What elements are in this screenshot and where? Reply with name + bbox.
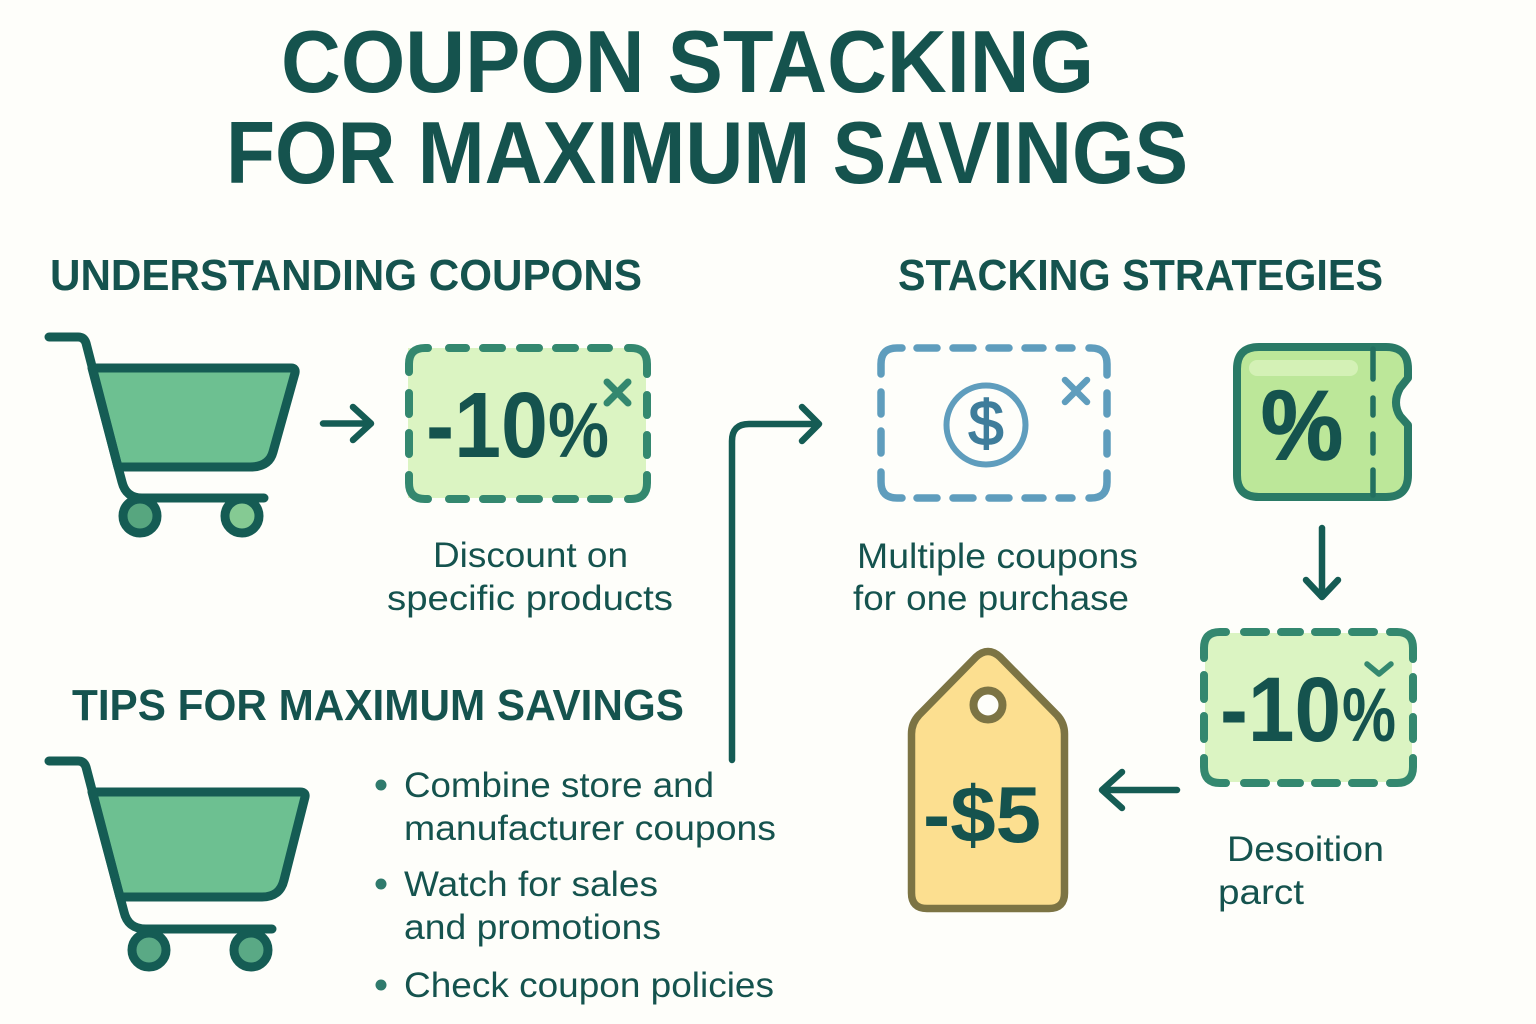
coupon: dollar: $	[968, 389, 1004, 459]
coupon: percent ticket	[1237, 347, 1408, 497]
text: multiple coupons caption: Multiple coupons	[857, 537, 1138, 576]
coupon: minus 10 percent: %	[548, 386, 609, 474]
coupon: second minus 10 percent	[1204, 632, 1413, 783]
text: multiple coupons caption: for one purchase	[853, 579, 1129, 618]
price tag	[912, 652, 1064, 908]
arrow: left	[1102, 772, 1177, 808]
arrow: down	[1306, 528, 1338, 597]
arrow: tips to strategies	[732, 407, 819, 760]
title: FOR MAXIMUM SAVINGS	[226, 103, 1188, 202]
heading: understanding coupons: UNDERSTANDING COUPONS	[50, 251, 642, 300]
title	[226, 12, 1188, 202]
text: desoition caption	[1218, 830, 1384, 912]
text: multiple coupons caption	[853, 537, 1138, 618]
title: COUPON STACKING	[281, 12, 1094, 111]
arrow: cart to coupon	[323, 407, 371, 440]
tips list: Watch for sales	[404, 865, 658, 904]
icon: shopping cart bottom	[49, 761, 305, 967]
tips list	[376, 766, 776, 1005]
text: discount caption: Discount on	[433, 536, 628, 575]
coupon: minus 10 percent: -10	[426, 373, 548, 477]
tips list: manufacturer coupons	[404, 809, 776, 848]
price tag: -$5	[923, 770, 1041, 859]
text: discount caption	[387, 536, 673, 618]
coupon: dollar	[881, 348, 1107, 498]
heading: tips: TIPS FOR MAXIMUM SAVINGS	[72, 681, 684, 730]
coupon: percent ticket: %	[1261, 370, 1343, 480]
heading: stacking strategies: STACKING STRATEGIES	[898, 251, 1383, 300]
text: desoition caption: Desoition	[1227, 830, 1384, 869]
tips list: and promotions	[404, 908, 661, 947]
text: desoition caption: parct	[1218, 873, 1304, 912]
text: discount caption: specific products	[387, 579, 673, 618]
tips list: Check coupon policies	[404, 966, 774, 1005]
tips list: Combine store and	[404, 766, 714, 805]
coupon: second minus 10 percent: -10	[1220, 659, 1341, 761]
coupon: second minus 10 percent: %	[1342, 673, 1396, 758]
coupon: minus 10 percent	[408, 348, 647, 499]
icon: shopping cart top	[49, 337, 295, 533]
